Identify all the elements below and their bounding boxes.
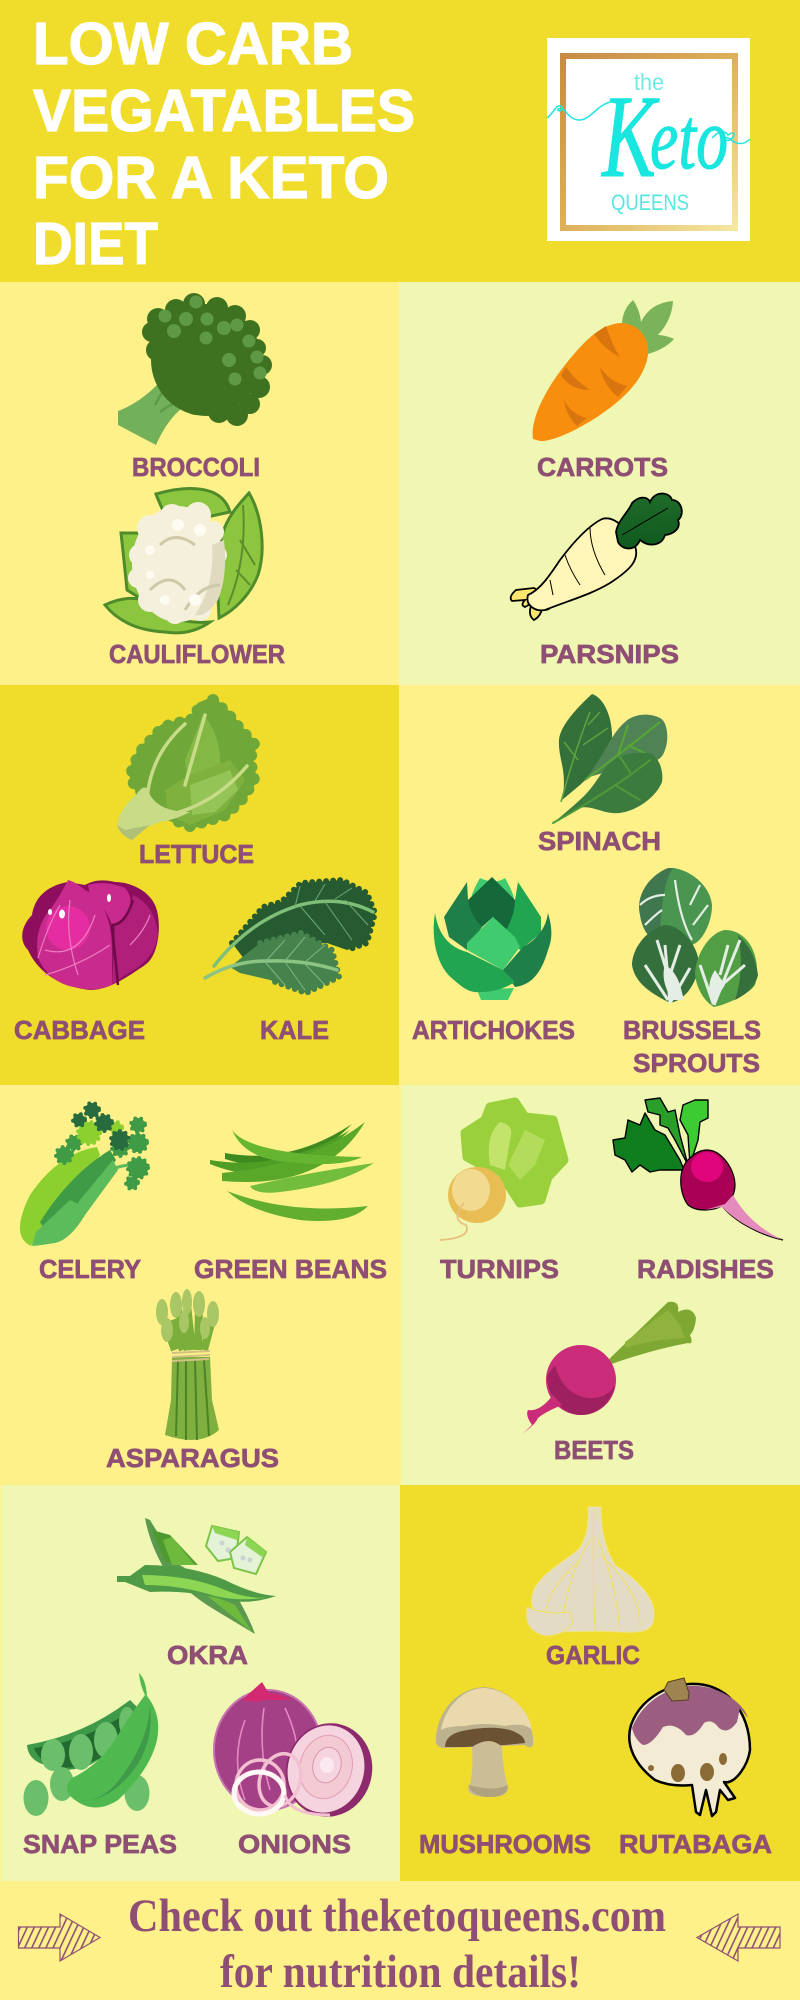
icon: broccoli xyxy=(118,293,272,445)
label: asparagus: ASPARAGUS xyxy=(106,1443,279,1473)
label: cabbage: CABBAGE xyxy=(14,1015,145,1045)
icon: parsnip xyxy=(511,494,682,620)
logo: the Keto Queens: the xyxy=(634,69,664,95)
footer call to action text: Check out theketoqueens.com xyxy=(128,1890,666,1942)
panel: garlic, mushrooms, rutabaga xyxy=(400,1485,800,1881)
logo: the Keto Queens: K xyxy=(601,71,660,202)
label: onions: ONIONS xyxy=(238,1829,351,1859)
title: FOR A KETO xyxy=(33,145,389,211)
label: artichokes: ARTICHOKES xyxy=(412,1015,575,1045)
label: snap peas: SNAP PEAS xyxy=(23,1829,177,1859)
icon: green beans xyxy=(210,1122,374,1221)
label: okra: OKRA xyxy=(167,1640,248,1670)
title: LOW CARB xyxy=(33,11,353,77)
label: green beans: GREEN BEANS xyxy=(194,1254,387,1284)
icon: radish xyxy=(613,1098,783,1240)
icon: garlic xyxy=(526,1507,654,1636)
footer call to action text: for nutrition details! xyxy=(220,1946,581,1998)
panel: okra, snap peas, onions xyxy=(1,1485,400,1881)
icon: asparagus xyxy=(156,1289,219,1440)
icon: celery xyxy=(20,1103,148,1246)
icon: rutabaga xyxy=(629,1678,750,1816)
icon: beet xyxy=(522,1302,696,1434)
icon: spinach xyxy=(553,694,667,823)
icon: cabbage xyxy=(22,880,159,990)
label: carrots: CARROTS xyxy=(537,452,668,482)
icon: kale xyxy=(205,880,375,993)
label: celery: CELERY xyxy=(39,1254,141,1284)
arrow: right side pointing left xyxy=(697,1914,780,1961)
logo: the Keto Queens xyxy=(547,38,750,241)
label: radishes: RADISHES xyxy=(637,1254,774,1284)
label: beets: BEETS xyxy=(554,1435,634,1465)
logo: the Keto Queens: QUEENS xyxy=(611,190,689,215)
icon: snap peas xyxy=(24,1673,158,1816)
icon: mushroom xyxy=(436,1687,533,1797)
panel: carrots and parsnips xyxy=(399,282,800,686)
panel: footer call to action xyxy=(0,1881,800,2000)
label: brussels sprouts xyxy=(623,1015,761,1078)
header band xyxy=(0,0,800,282)
title: DIET xyxy=(33,211,158,277)
footer call to action text xyxy=(128,1890,666,1998)
icon: turnip xyxy=(440,1102,564,1240)
title xyxy=(33,11,415,277)
label: mushrooms: MUSHROOMS xyxy=(419,1829,591,1859)
title: VEGATABLES xyxy=(33,78,415,144)
label: brussels sprouts: BRUSSELS xyxy=(623,1015,761,1045)
label: turnips: TURNIPS xyxy=(440,1254,559,1284)
arrow: left side pointing right xyxy=(18,1914,100,1961)
icon: cauliflower xyxy=(105,488,262,633)
panel: broccoli and cauliflower xyxy=(0,282,398,686)
label: kale: KALE xyxy=(260,1015,329,1045)
panel: turnips, radishes, beets xyxy=(401,1085,800,1485)
label: parsnips: PARSNIPS xyxy=(540,639,679,669)
logo: the Keto Queens: eto xyxy=(650,91,728,188)
label: rutabaga: RUTABAGA xyxy=(619,1829,772,1859)
panel: lettuce, cabbage, kale xyxy=(0,685,399,1085)
panel: spinach, artichokes, brussels sprouts xyxy=(399,685,800,1085)
label: brussels sprouts: SPROUTS xyxy=(633,1048,760,1078)
icon: carrot xyxy=(533,300,674,441)
icon: onions xyxy=(214,1682,383,1827)
icon: lettuce xyxy=(117,700,254,840)
label: broccoli: BROCCOLI xyxy=(132,452,260,482)
label: spinach: SPINACH xyxy=(538,826,661,856)
icon: okra xyxy=(117,1518,276,1634)
panel: celery, green beans, asparagus xyxy=(0,1085,400,1485)
icon: brussels sprouts xyxy=(632,868,758,1007)
label: garlic: GARLIC xyxy=(546,1640,640,1670)
label: cauliflower: CAULIFLOWER xyxy=(109,639,285,669)
label: lettuce: LETTUCE xyxy=(139,839,254,869)
icon: artichoke xyxy=(434,877,551,1000)
